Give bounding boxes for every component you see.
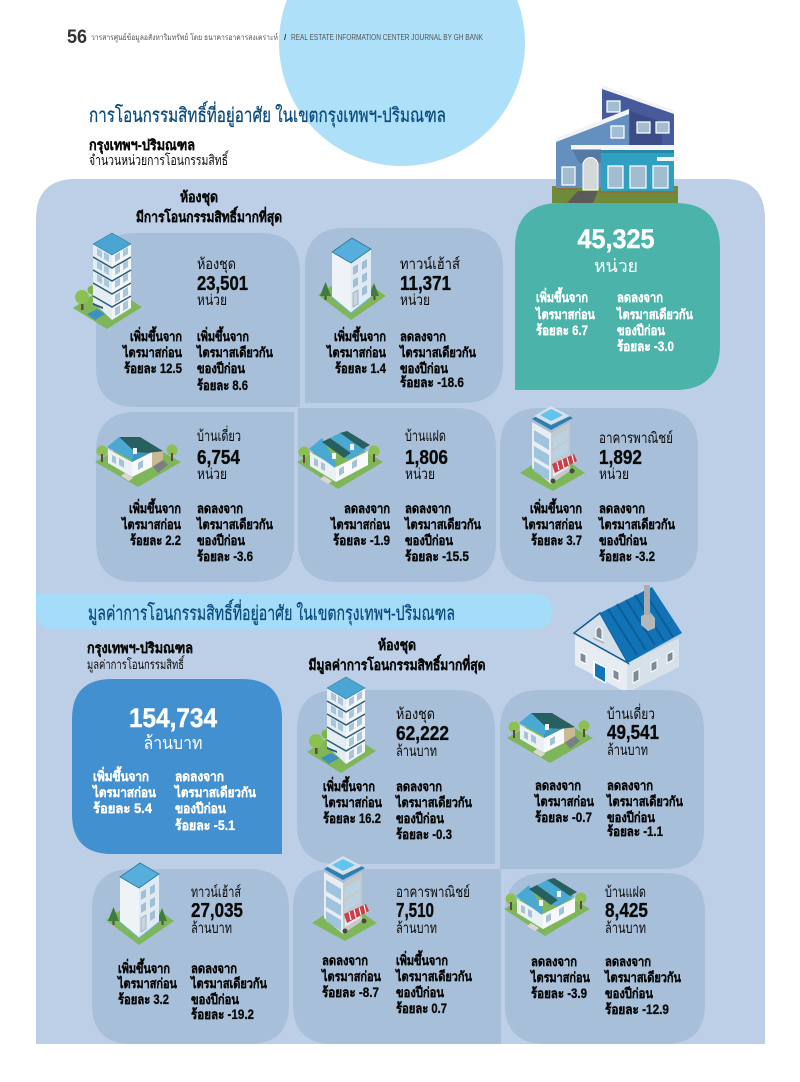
heading: condo most transfers: มีการโอนกรรมสิทธิ์มากที่สุด	[136, 206, 282, 226]
panel: condo units: ห้องชุด	[197, 256, 236, 274]
panel: townhouse value	[92, 869, 289, 1044]
panel: semi-detached units: ลดลงจาก	[405, 501, 451, 516]
icon: semi-detached house	[297, 431, 383, 489]
panel: total units: ลดลงจาก	[617, 290, 663, 305]
panel: townhouse units: ของปีก่อน	[400, 361, 449, 376]
panel: total value: ร้อยละ 5.4	[93, 801, 152, 816]
icon: townhouse value	[106, 863, 174, 945]
heading: condo most transfers: ห้องชุด	[180, 189, 218, 206]
panel: detached house units: ร้อยละ -3.6	[197, 549, 253, 564]
icon: detached house	[95, 437, 181, 487]
panel: semi-detached value: ไตรมาสเดียวกัน	[603, 969, 682, 985]
heading: condo highest value	[308, 637, 486, 674]
panel: detached house units: หน่วย	[197, 466, 227, 483]
icon: blue roof house	[574, 585, 682, 693]
panel: commercial units: 1,892	[599, 447, 642, 469]
panel: commercial value: ล้านบาท	[396, 920, 437, 937]
panel: condo units: เพิ่มขึ้นจาก	[197, 326, 249, 344]
panel: commercial units	[500, 408, 698, 582]
title: section 1: การโอนกรรมสิทธิ์ที่อยู่อาศัย ในเขตกรุงเทพฯ-ปริมณฑล	[89, 100, 446, 128]
panel: semi-detached units: หน่วย	[405, 466, 435, 483]
panel: semi-detached value: ร้อยละ -12.9	[605, 1002, 669, 1017]
page header: REAL ESTATE INFORMATION CENTER JOURNAL BY GH BANK	[291, 33, 484, 42]
panel: commercial value: ไตรมาสก่อน	[320, 968, 382, 984]
panel: townhouse units: ลดลงจาก	[400, 329, 446, 344]
panel: townhouse value: ของปีก่อน	[191, 992, 240, 1007]
subtitle: section 1: จำนวนหน่วยการโอนกรรมสิทธิ์	[89, 150, 229, 168]
panel: total value: 154,734	[129, 703, 217, 733]
subtitle: section 1: กรุงเทพฯ-ปริมณฑล	[89, 137, 195, 154]
panel: commercial units: ไตรมาสก่อน	[521, 516, 583, 532]
panel: detached value: ไตรมาสก่อน	[533, 793, 595, 809]
subtitle: section 2: มูลค่าการโอนกรรมสิทธิ์	[87, 655, 185, 673]
panel: semi-detached units: ร้อยละ -15.5	[405, 549, 469, 564]
panel: semi-detached units: ลดลงจาก	[344, 501, 390, 516]
panel: commercial units: หน่วย	[599, 466, 629, 483]
panel: condo value: 62,222	[396, 723, 449, 745]
panel: total units: หน่วย	[594, 256, 638, 276]
panel: commercial value: เพิ่มขึ้นจาก	[396, 950, 448, 968]
panel: townhouse value: 27,035	[191, 900, 243, 922]
panel: commercial units: ของปีก่อน	[599, 533, 648, 548]
panel: detached house units: ร้อยละ 2.2	[130, 533, 181, 548]
panel: total value: เพิ่มขึ้นจาก	[93, 766, 149, 784]
panel: semi-detached units: 1,806	[405, 447, 448, 469]
panel: detached value: ล้านบาท	[607, 742, 648, 759]
panel: detached value: ของปีก่อน	[607, 810, 656, 825]
panel: townhouse value: ไตรมาสก่อน	[116, 975, 178, 991]
panel: detached house units: ลดลงจาก	[197, 501, 243, 516]
panel: detached house units: เพิ่มขึ้นจาก	[129, 498, 181, 516]
page header: /	[284, 33, 287, 42]
panel: detached value: ลดลงจาก	[607, 778, 653, 793]
icon: semi-detached value	[504, 878, 590, 936]
panel: commercial units: ร้อยละ -3.2	[599, 549, 655, 564]
panel: semi-detached value: ของปีก่อน	[605, 986, 654, 1001]
panel: semi-detached units: ไตรมาสเดียวกัน	[403, 516, 482, 532]
panel: semi-detached units: บ้านแฝด	[405, 428, 446, 445]
panel: total value: ไตรมาสก่อน	[91, 784, 157, 800]
panel: detached house units: ไตรมาสเดียวกัน	[195, 516, 274, 532]
panel: condo units: เพิ่มขึ้นจาก	[130, 326, 182, 344]
page header: 56	[67, 27, 87, 48]
panel: condo units: หน่วย	[197, 292, 227, 309]
icon: townhouse	[318, 238, 386, 320]
icon: detached house value	[507, 713, 593, 763]
panel: detached value: ลดลงจาก	[535, 778, 581, 793]
panel: detached value: ร้อยละ -0.7	[535, 810, 592, 825]
panel: semi-detached value	[505, 873, 705, 1044]
heading: condo highest value: มีมูลค่าการโอนกรรมสิทธิ์มากที่สุด	[308, 654, 486, 674]
panel: commercial value: อาคารพาณิชย์	[396, 884, 470, 901]
panel: commercial value: ไตรมาสเดียวกัน	[394, 968, 473, 984]
panel: semi-detached units: ของปีก่อน	[405, 533, 454, 548]
panel: semi-detached value: ลดลงจาก	[531, 954, 577, 969]
panel: townhouse units: 11,371	[400, 273, 451, 295]
banner: section 2 title: มูลค่าการโอนกรรมสิทธิ์ที่อยู่อาศัย ในเขตกรุงเทพฯ-ปริมณฑล	[88, 598, 455, 626]
banner: section 2 title	[36, 594, 552, 629]
panel: total value	[72, 679, 282, 854]
panel: semi-detached value: ลดลงจาก	[605, 954, 651, 969]
panel: condo value: ของปีก่อน	[396, 811, 445, 826]
panel: condo value: ไตรมาสก่อน	[321, 794, 383, 810]
panel: detached house units	[96, 412, 294, 582]
panel: condo value: ร้อยละ 16.2	[323, 811, 381, 826]
panel: townhouse value: ไตรมาสเดียวกัน	[189, 975, 268, 991]
panel: detached value: ร้อยละ -1.1	[607, 824, 663, 839]
panel: condo units: ร้อยละ 12.5	[124, 361, 182, 376]
panel: condo units: ไตรมาสเดียวกัน	[195, 344, 274, 360]
panel: total units: ของปีก่อน	[617, 323, 666, 338]
panel: townhouse units: ร้อยละ 1.4	[335, 361, 386, 376]
panel: townhouse value: ลดลงจาก	[191, 961, 237, 976]
panel: condo value	[297, 690, 495, 864]
panel: condo value: ล้านบาท	[396, 743, 437, 760]
panel: commercial units: ลดลงจาก	[599, 501, 645, 516]
panel: total value: ร้อยละ -5.1	[175, 818, 235, 833]
subtitle: section 1	[89, 137, 229, 168]
panel: condo value: ลดลงจาก	[396, 779, 442, 794]
panel: condo units	[96, 233, 300, 407]
panel: commercial units: เพิ่มขึ้นจาก	[530, 498, 582, 516]
panel: total value: ลดลงจาก	[175, 769, 224, 784]
panel: townhouse units: เพิ่มขึ้นจาก	[334, 326, 386, 344]
panel: townhouse value: เพิ่มขึ้นจาก	[118, 958, 170, 976]
panel: semi-detached value: บ้านแฝด	[605, 884, 646, 901]
heading: condo highest value: ห้องชุด	[378, 637, 416, 654]
panel: detached house units: 6,754	[197, 447, 241, 469]
icon: commercial building value	[312, 856, 377, 941]
panel: detached value: ไตรมาสเดียวกัน	[605, 793, 684, 809]
panel: detached value: 49,541	[607, 722, 659, 744]
panel: semi-detached value: ล้านบาท	[605, 920, 646, 937]
panel: commercial value: ของปีก่อน	[396, 985, 445, 1000]
subtitle: section 2: กรุงเทพฯ-ปริมณฑล	[87, 640, 193, 657]
panel: total value: ไตรมาสเดียวกัน	[173, 784, 257, 800]
panel: condo value: เพิ่มขึ้นจาก	[323, 776, 375, 794]
panel: commercial units: อาคารพาณิชย์	[599, 430, 673, 447]
panel: commercial value: ร้อยละ -8.7	[322, 985, 379, 1000]
panel: commercial value	[293, 869, 501, 1044]
header circle	[279, 0, 525, 166]
panel: townhouse units: ร้อยละ -18.6	[400, 375, 464, 390]
panel: total value: ของปีก่อน	[175, 801, 227, 816]
panel: semi-detached units: ไตรมาสก่อน	[329, 516, 391, 532]
panel: semi-detached value: ร้อยละ -3.9	[531, 986, 587, 1001]
panel: condo units: ของปีก่อน	[197, 361, 246, 376]
panel: townhouse value: ล้านบาท	[191, 920, 232, 937]
panel: semi-detached units: ร้อยละ -1.9	[333, 533, 390, 548]
panel: commercial value: ลดลงจาก	[322, 953, 368, 968]
panel: townhouse value: ร้อยละ -19.2	[191, 1007, 254, 1022]
subtitle: section 2	[87, 640, 193, 673]
icon: modern house	[552, 85, 678, 203]
panel: commercial value: 7,510	[396, 900, 434, 922]
heading: condo most transfers	[136, 189, 282, 226]
panel: detached value: บ้านเดี่ยว	[607, 703, 655, 723]
panel: total value: ล้านบาท	[144, 733, 202, 753]
panel: townhouse value: ทาวน์เฮ้าส์	[191, 884, 241, 901]
panel: detached house units: ไตรมาสก่อน	[120, 516, 182, 532]
panel: condo units: ร้อยละ 8.6	[197, 378, 248, 393]
panel: detached house units: ของปีก่อน	[197, 533, 246, 548]
panel: semi-detached value: ไตรมาสก่อน	[529, 969, 591, 985]
panel: total units: ไตรมาสเดียวกัน	[615, 306, 694, 322]
panel: townhouse units: ไตรมาสก่อน	[325, 344, 387, 360]
panel: total units: ไตรมาสก่อน	[534, 306, 596, 322]
panel: condo value: ไตรมาสเดียวกัน	[394, 794, 473, 810]
panel: condo units: ไตรมาสก่อน	[121, 344, 183, 360]
icon: commercial building	[520, 406, 585, 491]
panel: detached house units: บ้านเดี่ยว	[197, 425, 241, 445]
panel: townhouse units: ทาวน์เฮ้าส์	[400, 256, 460, 273]
panel: total units: ร้อยละ 6.7	[536, 323, 588, 338]
panel: commercial units: ไตรมาสเดียวกัน	[597, 516, 676, 532]
panel: semi-detached value: 8,425	[605, 900, 648, 922]
panel: townhouse units	[305, 228, 503, 403]
background panel	[36, 179, 765, 1044]
panel: townhouse value: ร้อยละ 3.2	[118, 992, 169, 1007]
panel: total units: เพิ่มขึ้นจาก	[536, 287, 588, 305]
panel: commercial units: ร้อยละ 3.7	[531, 533, 582, 548]
panel: condo value: ร้อยละ -0.3	[396, 827, 452, 842]
panel: condo units: 23,501	[197, 273, 248, 295]
panel: condo value: ห้องชุด	[396, 706, 435, 724]
panel: detached value	[500, 690, 704, 869]
page header: วารสารศูนย์ข้อมูลอสังหาริมทรัพย์ โดย ธนาคารอาคารสงเคราะห์	[91, 32, 278, 43]
panel: total units	[515, 203, 720, 390]
panel: total units: 45,325	[578, 224, 654, 254]
panel: townhouse units: หน่วย	[400, 292, 430, 309]
panel: townhouse units: ไตรมาสเดียวกัน	[398, 344, 477, 360]
panel: total units: ร้อยละ -3.0	[617, 339, 674, 354]
icon: condo tower value	[307, 677, 376, 773]
panel: commercial value: ร้อยละ 0.7	[396, 1001, 447, 1016]
icon: condo tower	[73, 233, 142, 329]
page header	[67, 27, 484, 48]
panel: semi-detached units	[298, 408, 496, 582]
